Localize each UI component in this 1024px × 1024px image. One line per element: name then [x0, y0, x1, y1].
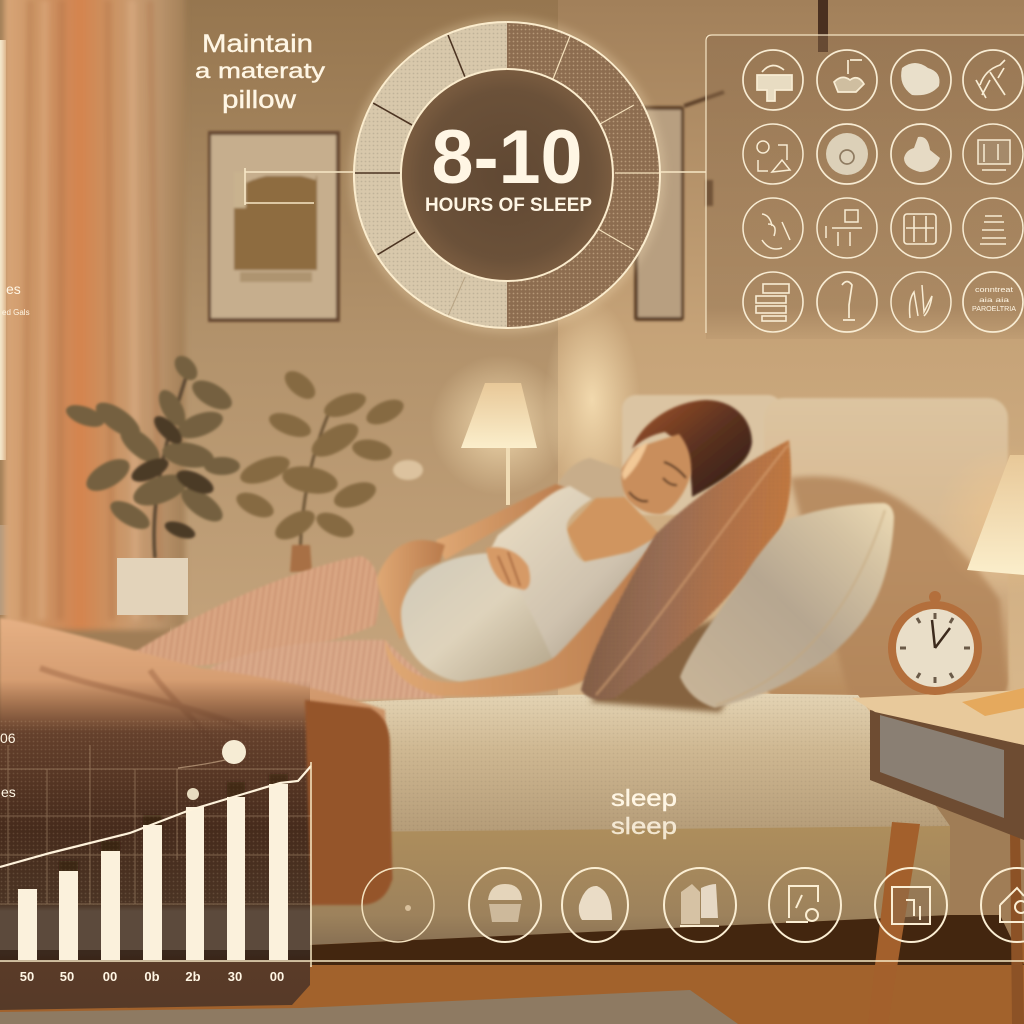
icon: stack of books — [743, 272, 803, 332]
woman: belly — [401, 553, 553, 682]
chart marker small — [187, 788, 199, 800]
chart x-axis labels: 50 — [60, 969, 74, 984]
cord — [818, 0, 828, 52]
bottom icon row — [362, 868, 1024, 942]
icon: book and house — [664, 868, 736, 942]
icon: tablet — [769, 868, 841, 942]
right bedside lamp — [935, 445, 1024, 595]
icon: small text badge: conntreat — [975, 287, 1013, 294]
woman: hair — [632, 400, 752, 497]
woman: near arm — [385, 540, 660, 696]
icon: burger — [469, 868, 541, 942]
clock — [888, 591, 982, 695]
panel backdrop — [706, 35, 1024, 339]
ring caption: HOURS OF SLEEP — [425, 195, 592, 216]
icon: framed document — [875, 868, 947, 942]
heading: maintain a maternity pillow: Maintain — [202, 30, 313, 58]
wall: right section — [558, 0, 1024, 720]
icon: blob shape — [891, 124, 951, 184]
chart x-axis labels: 30 — [228, 969, 242, 984]
curtain — [4, 0, 185, 630]
blanket: orange side — [305, 700, 392, 905]
left edge label — [2, 281, 30, 317]
ring left texture — [354, 22, 507, 328]
icon: tools — [743, 50, 803, 110]
icon: box — [891, 198, 951, 258]
woman: shirt — [480, 486, 656, 662]
chart y-axis labels: 06 — [0, 730, 16, 746]
plant pot — [117, 558, 188, 615]
ring outlines — [354, 22, 660, 328]
wall: left section — [170, 0, 562, 720]
ring left half — [354, 22, 507, 328]
icon: sink — [817, 198, 877, 258]
chart x-axis labels: 00 — [270, 969, 284, 984]
sleep captions: sleep — [611, 813, 677, 839]
heading: maintain a maternity pillow: a materaty — [195, 60, 326, 83]
headboard shadow behind pillow — [790, 476, 1008, 700]
blanket: upper folds — [0, 618, 392, 905]
plant: right plant — [233, 366, 423, 572]
rug — [0, 990, 738, 1024]
icon: small text badge — [963, 272, 1023, 332]
ring right texture — [507, 22, 660, 328]
woman: neck and chest — [566, 497, 660, 562]
chart grid — [0, 745, 311, 904]
bed shadow under base — [300, 915, 1024, 965]
ring right half — [507, 22, 660, 328]
chart x-axis labels: 50 — [20, 969, 34, 984]
ring segment dividers — [355, 35, 465, 255]
nightstand — [852, 688, 1024, 1024]
lower pants leg — [210, 640, 445, 702]
icon: pillow shape — [891, 50, 951, 110]
blanket: lower dark chart backdrop — [0, 680, 310, 1010]
icon: document — [963, 124, 1023, 184]
chart y-axis labels: es — [1, 784, 16, 800]
connector line to icon panel — [661, 171, 706, 173]
icon: round food — [817, 124, 877, 184]
floor — [0, 940, 1024, 1024]
chart x-axis labels — [20, 969, 284, 984]
icon: scribble figure — [743, 198, 803, 258]
chart bars — [18, 784, 288, 960]
woman: face — [621, 434, 691, 514]
mattress — [340, 694, 950, 832]
woman: hand on belly — [486, 547, 530, 590]
sleep captions — [611, 785, 677, 839]
shadow under pillows — [590, 600, 780, 712]
icon: house — [981, 868, 1024, 942]
connector lines from picture to ring — [245, 168, 356, 205]
chart bar shadows — [59, 774, 288, 871]
donut: sleep hours ring — [354, 22, 661, 328]
radiator — [0, 525, 22, 615]
woman: far arm — [377, 484, 572, 640]
icon: pillow — [562, 868, 628, 942]
bed base — [310, 826, 950, 945]
icon: book and leaf — [817, 50, 877, 110]
panel: icon grid — [706, 35, 1024, 339]
left edge label: ed Gals — [2, 308, 30, 317]
ring glow — [354, 22, 660, 328]
icon: small text badge: aia aia — [979, 298, 1010, 304]
icon: goblet — [817, 272, 877, 332]
chart y-axis labels — [0, 730, 16, 800]
chart x-axis labels: 0b — [144, 969, 160, 984]
icon: sketch figure — [963, 50, 1023, 110]
icon: leaf sketch — [891, 272, 951, 332]
framed picture: left wall — [208, 131, 340, 322]
plant: left potted plant — [63, 351, 240, 558]
chart axes — [0, 762, 1024, 967]
chart marker line — [178, 760, 225, 768]
icon: empty circle — [362, 868, 434, 942]
chart trend line — [0, 766, 311, 867]
lamp: floor lamp behind bed — [430, 355, 570, 505]
panel frame — [706, 35, 1024, 333]
heading: maintain a maternity pillow: pillow — [222, 86, 297, 114]
blanket: texture — [0, 720, 310, 905]
white pillow — [680, 503, 894, 708]
big number: 8-10 — [432, 115, 582, 200]
chart x-axis labels: 2b — [185, 969, 201, 984]
chart x-axis labels: 00 — [103, 969, 117, 984]
wall glow — [544, 300, 640, 500]
icon: stacked glyph — [963, 198, 1023, 258]
upper pants leg — [130, 556, 380, 668]
bar chart — [0, 730, 1024, 984]
window — [0, 40, 6, 460]
icon: scribble tools — [743, 124, 803, 184]
sleep captions: sleep — [611, 785, 677, 811]
chart baseline shadow — [0, 950, 311, 961]
heading: maintain a maternity pillow — [195, 30, 326, 114]
chart marker large — [222, 740, 246, 764]
ring center — [401, 69, 613, 281]
icon: small text badge: PAROELTRIA — [972, 306, 1016, 313]
left edge label: es — [6, 281, 21, 297]
brown pillow — [581, 440, 791, 700]
framed picture: right wall — [634, 92, 724, 321]
headboard — [557, 395, 1008, 700]
